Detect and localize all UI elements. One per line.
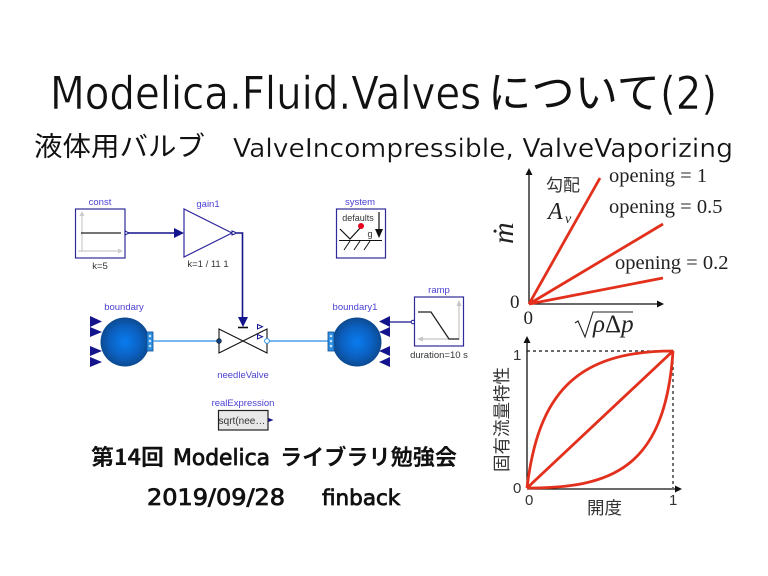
dotted guides (527, 351, 673, 488)
red lines (529, 178, 663, 304)
pipes (153, 340, 328, 342)
block: const (76, 197, 125, 272)
axes (527, 342, 677, 489)
axis ticks (513, 347, 677, 509)
axis zeros: 0 (510, 292, 520, 313)
block: system: defaults (342, 213, 374, 223)
title (50, 59, 717, 121)
axis zeros (510, 292, 533, 329)
chart: inherent flow characteristic (492, 336, 682, 518)
line labels: opening = 0.5 (609, 196, 722, 218)
red curves (527, 351, 673, 488)
axes (529, 172, 660, 304)
block: system: g (367, 229, 373, 239)
block: system (336, 197, 386, 258)
slope label: v (565, 212, 572, 227)
axis ticks: 1 (513, 347, 521, 364)
block: realExpression (212, 398, 274, 430)
footer: date and author: finback (322, 486, 401, 511)
x axis label: 開度 (587, 498, 622, 518)
title: について (488, 59, 660, 121)
title: (2) (660, 68, 717, 121)
block: boundary: boundary (104, 302, 144, 313)
block: boundary1 (328, 302, 390, 367)
block: system: system (345, 197, 375, 208)
axis ticks: 1 (669, 492, 677, 509)
footer: event (91, 440, 457, 472)
line labels: opening = 1 (609, 165, 707, 187)
slope label: 勾配 (546, 176, 580, 195)
block: realExpression: realExpression (212, 398, 274, 409)
block: gain1 (184, 199, 237, 270)
slope label: A (546, 199, 563, 225)
block: const: k=5 (92, 261, 108, 272)
block: needleValve (217, 324, 269, 381)
axis ticks: 0 (525, 492, 533, 509)
block: gain1: gain1 (196, 199, 220, 210)
chart: flow rate vs pressure (487, 165, 728, 338)
wire: const to gain (125, 228, 184, 238)
block: gain1: k=1 / 11 1 (187, 259, 229, 270)
slope label (546, 176, 580, 227)
footer: event: ライブラリ勉強会 (280, 440, 457, 472)
subtitle: 液体用バルブ (34, 125, 205, 164)
line labels (609, 165, 728, 274)
axis ticks: 0 (513, 480, 521, 497)
footer: event: Modelica (173, 446, 270, 471)
diagram: Modelica model (76, 197, 468, 430)
x axis label (575, 311, 634, 338)
y axis label: ṁ (487, 222, 520, 244)
line labels: opening = 0.2 (615, 252, 728, 274)
x axis label: ρΔp (592, 311, 634, 338)
wire: gain to valve (237, 233, 248, 327)
footer: date and author (147, 486, 401, 511)
block: ramp: duration=10 s (410, 350, 468, 361)
block: const: const (89, 197, 112, 208)
block: ramp (388, 285, 468, 361)
block: realExpression: sqrt(nee… (219, 416, 265, 427)
subtitle (34, 125, 733, 164)
block: boundary (90, 302, 153, 367)
axis zeros: 0 (524, 308, 533, 329)
footer: event: 第14回 (91, 440, 164, 472)
y axis label: 固有流量特性 (492, 367, 512, 472)
block: boundary1: boundary1 (333, 302, 377, 313)
subtitle: ValveIncompressible, ValveVaporizing (233, 134, 733, 164)
block: needleValve: needleValve (217, 370, 269, 381)
title: Modelica.Fluid.Valves (50, 68, 481, 121)
block: ramp: ramp (428, 285, 450, 296)
footer: date and author: 2019/09/28 (147, 486, 285, 511)
